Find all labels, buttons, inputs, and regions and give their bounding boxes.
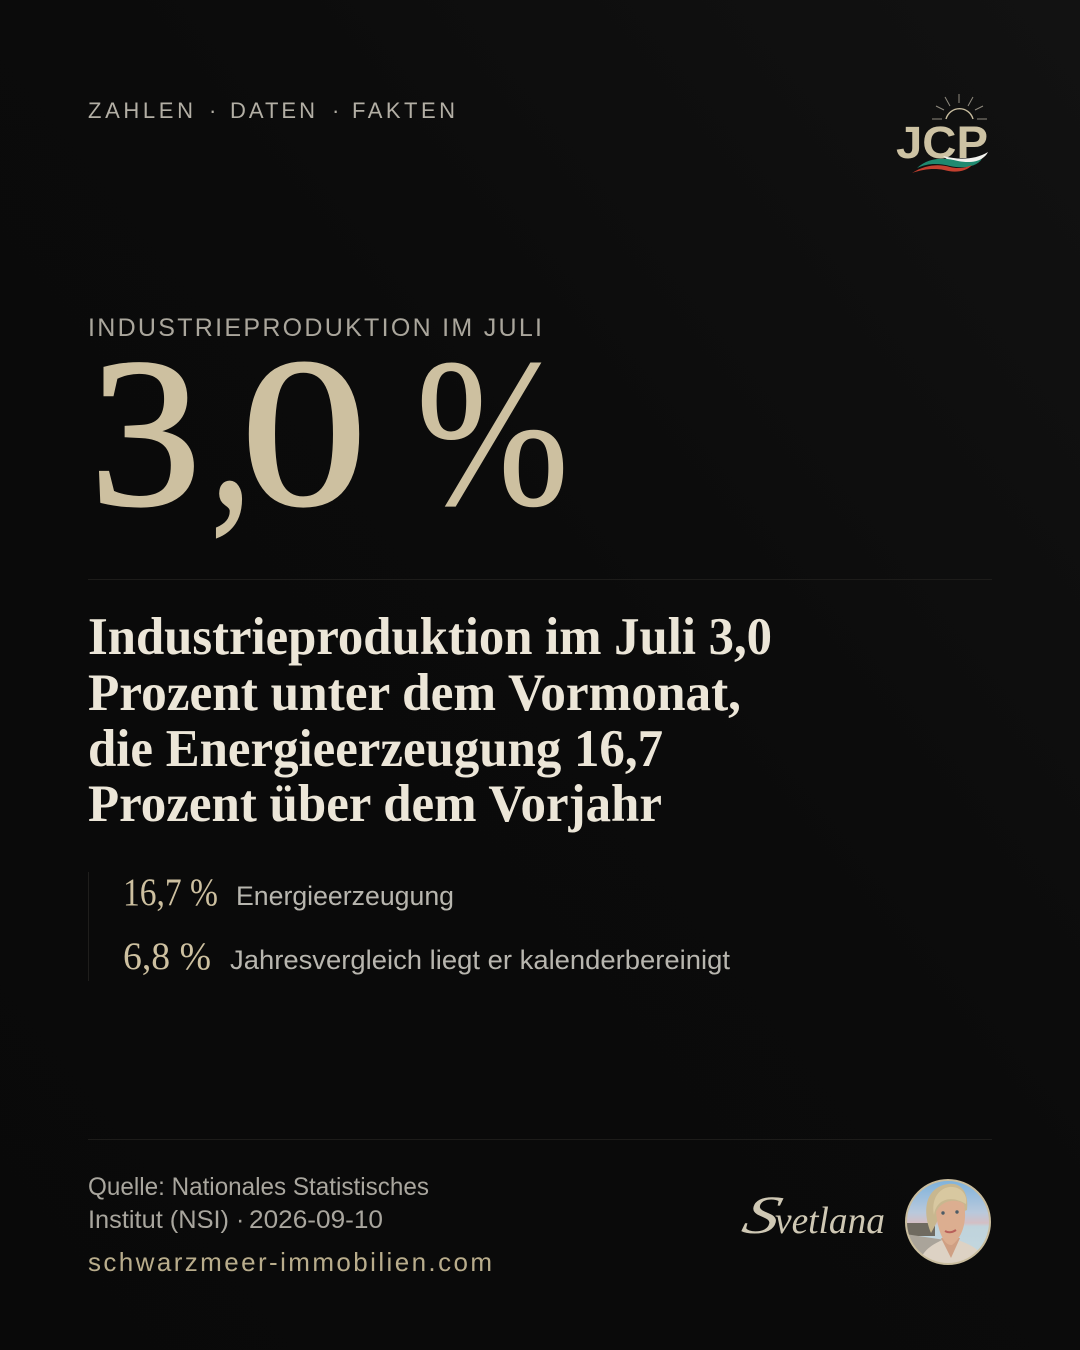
- hair: [926, 1184, 967, 1233]
- divider: [88, 579, 992, 580]
- headline: die Energieerzeugung 16,7: [88, 720, 663, 778]
- source text: ·: [236, 1206, 244, 1234]
- stat: 6,8 % Jahresvergleich: [123, 935, 731, 978]
- logo letters: JCP: [896, 117, 988, 168]
- signature: Svetlana: vetlana: [775, 1200, 885, 1242]
- eyes and lips: [941, 1211, 945, 1215]
- stat: 16,7 % Energieerzeugung: Energieerzeugung: [236, 881, 454, 911]
- headline: Prozent über dem Vorjahr: [88, 775, 662, 833]
- source text: Quelle: Nationales Statistisches: [88, 1173, 429, 1201]
- signature: Svetlana: [737, 1185, 885, 1245]
- source text: Institut (NSI): [88, 1206, 229, 1234]
- eyebrow: Zahlen Daten Fakten: FAKTEN: [352, 98, 455, 123]
- source text: 2026-09-10: [249, 1206, 383, 1234]
- eyebrow: Zahlen Daten Fakten: ·: [332, 98, 339, 123]
- eyebrow: Zahlen Daten Fakten: ZAHLEN: [88, 98, 193, 123]
- source text: [88, 1173, 429, 1234]
- stat: 16,7 % Energieerzeugung: 16,7 %: [123, 871, 218, 914]
- big number: 3,0 %: 0: [241, 315, 367, 550]
- icon: sun rays: [932, 94, 987, 119]
- eyebrow: Zahlen Daten Fakten: DATEN: [230, 98, 315, 123]
- big number: 3,0 %: [90, 315, 569, 550]
- eyebrow: Zahlen Daten Fakten: ·: [209, 98, 216, 123]
- big number: 3,0 %: %: [416, 315, 569, 550]
- stats list: [88, 871, 731, 981]
- fringe: [933, 1187, 966, 1215]
- shoulders: [923, 1240, 978, 1263]
- big number: 3,0 %: 3: [90, 315, 201, 550]
- avatar portrait: [905, 1180, 991, 1266]
- subtitle: Industrieproduktion im Juli: INDUSTRIEPRODUKTION IM JULI: [88, 314, 542, 342]
- stat: 6,8 % Jahresvergleich: 6,8 %: [123, 935, 211, 978]
- stat: 6,8 % Jahresvergleich: Jahresvergleich liegt er kalenderbereinigt: [230, 945, 731, 975]
- headline: [88, 608, 772, 833]
- website link: schwarzmeer-immobilien.com: [88, 1247, 492, 1277]
- eyebrow: Zahlen Daten Fakten: [88, 98, 455, 123]
- divider: [88, 1139, 992, 1140]
- icon: bulgarian flag wave: [912, 152, 988, 173]
- face: [936, 1201, 965, 1245]
- stat: 16,7 % Energieerzeugung: [123, 871, 454, 914]
- signature: Svetlana: S: [737, 1185, 788, 1245]
- logo: JCP: [896, 94, 988, 173]
- big number: 3,0 %: ,: [211, 315, 251, 550]
- headline: Industrieproduktion im Juli 3,0: [88, 608, 772, 666]
- headline: Prozent unter dem Vormonat,: [88, 664, 741, 722]
